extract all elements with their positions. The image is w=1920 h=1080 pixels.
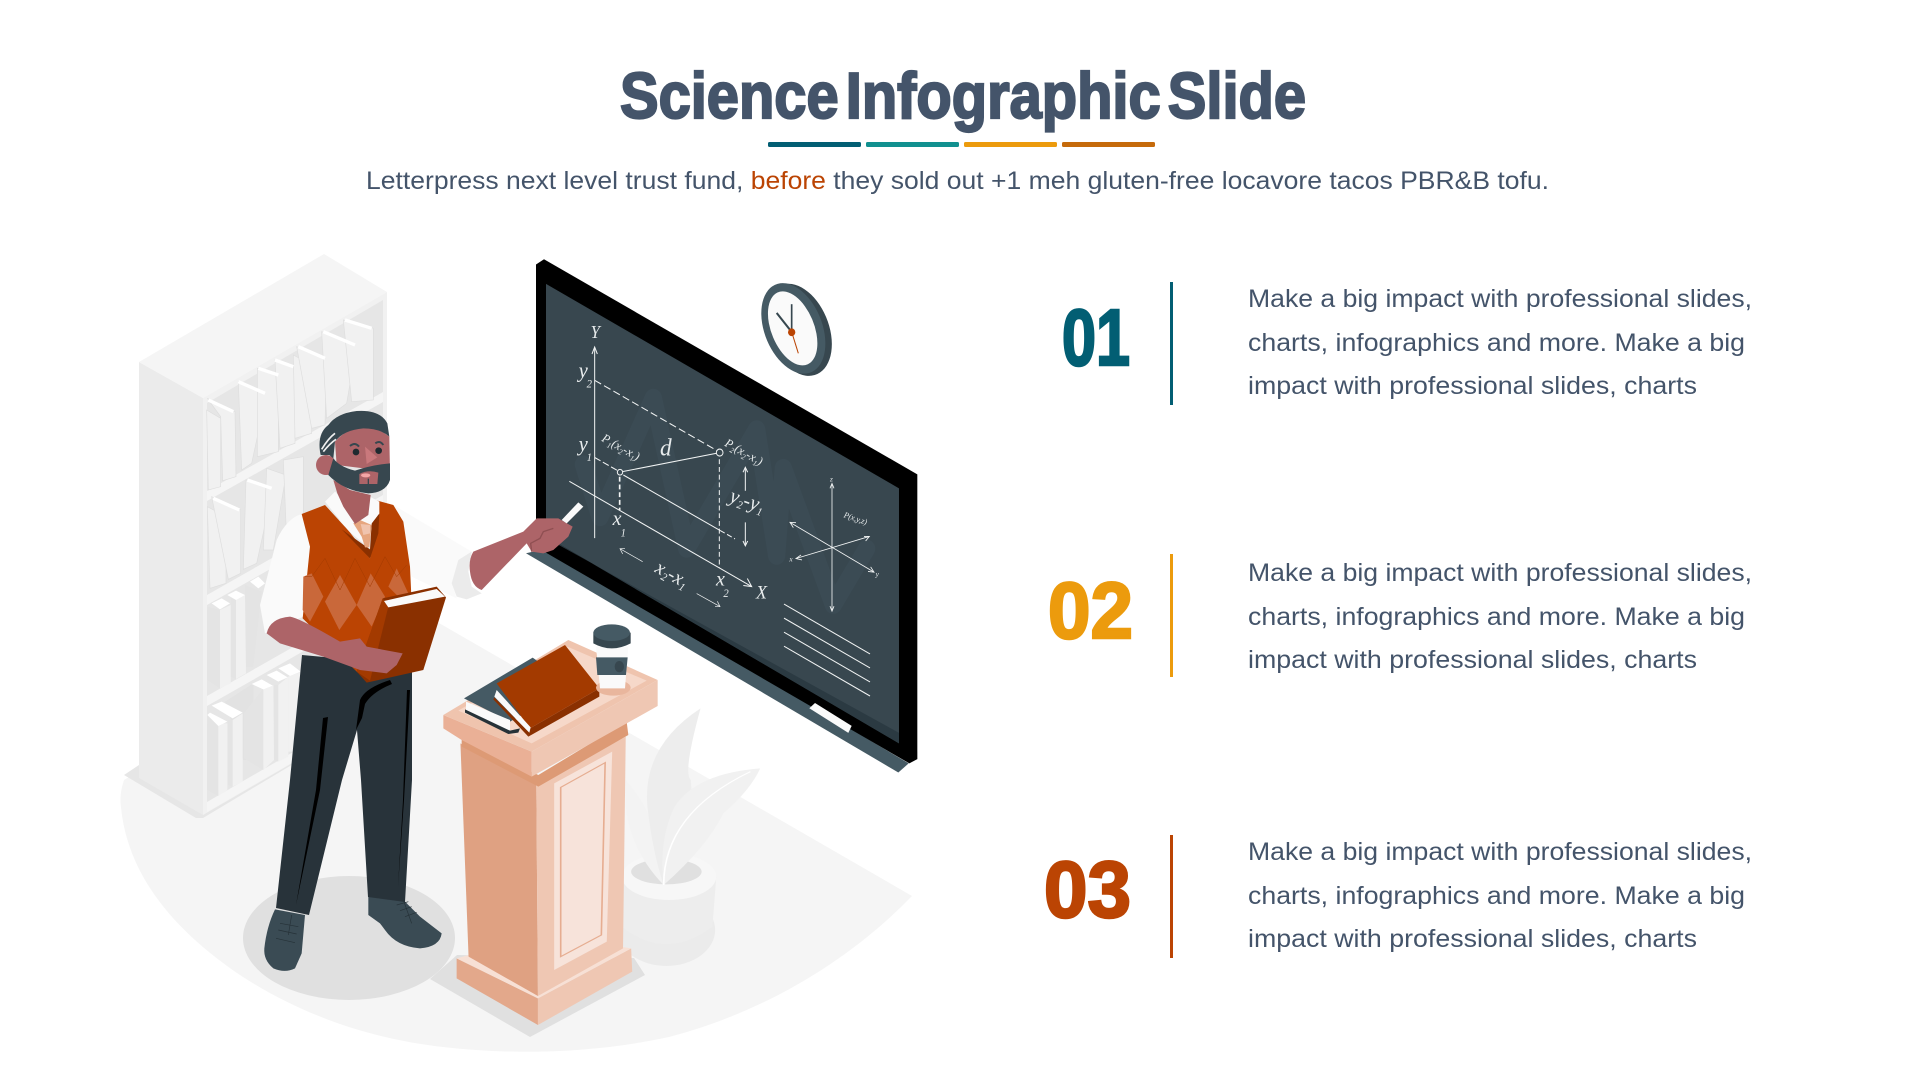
- graph labels: 1: [628, 453, 636, 463]
- lower shelf books: [207, 577, 302, 796]
- graph labels: 1: [605, 440, 613, 450]
- graph labels: 2: [617, 447, 624, 457]
- right sleeve cuff: [452, 552, 482, 599]
- description 02: [1248, 559, 1752, 674]
- leaves: [625, 780, 664, 885]
- graph labels: 1: [621, 528, 626, 540]
- graph labels: [577, 323, 768, 603]
- mouth: [359, 471, 378, 485]
- graph labels: -x: [621, 443, 636, 460]
- chalk: [562, 502, 583, 523]
- face: [335, 427, 390, 472]
- book tops: [208, 320, 372, 510]
- upper shelf books: [207, 320, 373, 588]
- graph labels: 1: [755, 506, 764, 519]
- neck: [333, 480, 371, 524]
- lectern cap sides: [443, 715, 532, 777]
- shoe laces: [276, 900, 417, 943]
- bookcase: [124, 254, 387, 818]
- bookcase interior: [207, 300, 383, 804]
- tie: [353, 520, 372, 547]
- description 03: [1248, 838, 1752, 953]
- trouser creases: [296, 680, 410, 905]
- graph labels: y: [577, 358, 588, 383]
- lectern column right: [536, 737, 626, 996]
- bookcase left side: [139, 362, 203, 815]
- eyebrows: [350, 442, 383, 447]
- vest pattern lines: [305, 557, 407, 590]
- graph labels: -y: [741, 489, 763, 516]
- graph labels: y: [577, 432, 588, 456]
- graph labels: x: [715, 568, 725, 591]
- pot: [621, 877, 716, 944]
- graph labels: -x: [664, 563, 687, 590]
- coffee cup: [593, 624, 631, 696]
- chalk on tray: [809, 703, 852, 733]
- 3D axes labels: z: [829, 474, 833, 483]
- dark book: [464, 658, 573, 722]
- graph labels: Y: [591, 323, 602, 342]
- title: Science Infographic Slide: [620, 59, 1306, 132]
- leaf vein: [664, 772, 750, 885]
- graph labels: (x: [732, 441, 747, 459]
- blackboard: [526, 259, 917, 772]
- graph labels: -x: [744, 447, 759, 465]
- eyes: [353, 447, 382, 455]
- board lower shade: [546, 536, 899, 743]
- graph labels: (x: [609, 436, 624, 454]
- item 01: [1062, 282, 1752, 405]
- lectern shadow: [430, 955, 645, 1037]
- sweater vest: [302, 500, 412, 680]
- nose: [365, 447, 377, 464]
- subtitle: Letterpress next level trust fund, before they sold out +1 meh gluten-free locavore tacos PBR&B tofu.: [366, 167, 1549, 195]
- wall clock: [749, 273, 845, 387]
- graph: distance formula: [569, 347, 752, 607]
- fist detail: [531, 528, 553, 552]
- head: [316, 411, 390, 524]
- graph labels: 2: [735, 499, 744, 512]
- lectern base: [457, 958, 538, 1025]
- number 01: 01: [1062, 293, 1130, 382]
- left sleeve: [260, 514, 310, 633]
- held book: [357, 587, 446, 683]
- grey streaks: [322, 433, 336, 452]
- graph labels: 2: [723, 588, 729, 600]
- graph labels: P: [723, 436, 735, 452]
- teacher: [260, 411, 583, 971]
- graph labels: 1: [587, 452, 592, 464]
- description 01: impact with professional slides, charts: [1248, 372, 1697, 400]
- description 01: charts, infographics and more. Make a big: [1248, 329, 1745, 357]
- 3D axes labels: x: [788, 554, 793, 563]
- graph labels: ): [631, 448, 642, 464]
- shelves: [207, 392, 383, 812]
- graph labels: 2: [587, 378, 593, 390]
- description 03: Make a big impact with professional slides,: [1248, 838, 1752, 866]
- description 01: [1248, 285, 1752, 400]
- beard: [328, 458, 390, 493]
- graph labels: x: [612, 507, 622, 530]
- description 02: impact with professional slides, charts: [1248, 646, 1697, 674]
- graph labels: ): [754, 453, 765, 469]
- chalk text lines: [784, 604, 870, 696]
- bookcase front frame: [203, 292, 387, 815]
- arms and book: [267, 502, 583, 683]
- item 02: [1048, 554, 1752, 677]
- graph labels: 2: [728, 445, 736, 455]
- description 03: charts, infographics and more. Make a big: [1248, 882, 1745, 910]
- vest neck: [342, 513, 379, 558]
- graph labels: 2: [740, 452, 747, 462]
- graph labels: X: [755, 582, 768, 603]
- bookcase base: [124, 752, 300, 818]
- lectern cap underside: [462, 722, 628, 787]
- graph labels: x: [652, 556, 669, 580]
- vest diamonds: [303, 568, 408, 630]
- holding arm: [267, 617, 403, 673]
- lectern top: [443, 640, 658, 752]
- divider 03: [1170, 835, 1173, 958]
- graph labels: y: [727, 485, 742, 509]
- trousers: [276, 655, 412, 915]
- item 03: [1044, 835, 1752, 958]
- floor: [120, 608, 912, 1052]
- divider 02: [1170, 554, 1173, 677]
- description 01: Make a big impact with professional slides,: [1248, 285, 1752, 313]
- lectern: [430, 624, 658, 1037]
- 3D axes labels: P(x,y,z): [842, 510, 868, 527]
- description 02: Make a big impact with professional slides,: [1248, 559, 1752, 587]
- description 03: impact with professional slides, charts: [1248, 925, 1697, 953]
- chalk smudges: [583, 398, 867, 605]
- shoes: [264, 897, 442, 971]
- title underline bars: [768, 142, 1155, 147]
- pointing arm: [470, 518, 573, 590]
- graph labels: 1: [751, 458, 759, 468]
- 3D axes labels: [788, 474, 880, 579]
- graph labels: 1: [677, 581, 687, 594]
- 3D axes labels: y: [875, 570, 880, 579]
- ear: [316, 455, 336, 475]
- man's floor shadow: [243, 876, 455, 1000]
- shirt and vest: [260, 492, 482, 680]
- bookcase top: [139, 254, 387, 398]
- graph labels: P: [600, 431, 612, 447]
- 3D axes: [790, 483, 874, 611]
- potted plant: [618, 708, 760, 966]
- lectern column left: [460, 743, 538, 996]
- divider 01: [1170, 282, 1173, 405]
- graph labels: d: [660, 435, 673, 462]
- hair: [319, 411, 389, 458]
- number 03: 03: [1044, 845, 1131, 934]
- chalk tray: [526, 549, 909, 772]
- shirt collar: [325, 492, 362, 532]
- board frame: [536, 259, 917, 763]
- illustration: teacher at blackboard: [120, 254, 917, 1052]
- description 02: charts, infographics and more. Make a big: [1248, 603, 1745, 631]
- wall light patch: [393, 505, 472, 598]
- lectern panel: [554, 752, 612, 970]
- orange book: [497, 645, 599, 728]
- board surface: [546, 284, 899, 743]
- number 02: 02: [1048, 566, 1133, 655]
- graph labels: 2: [659, 571, 669, 584]
- pot shadow: [618, 894, 715, 966]
